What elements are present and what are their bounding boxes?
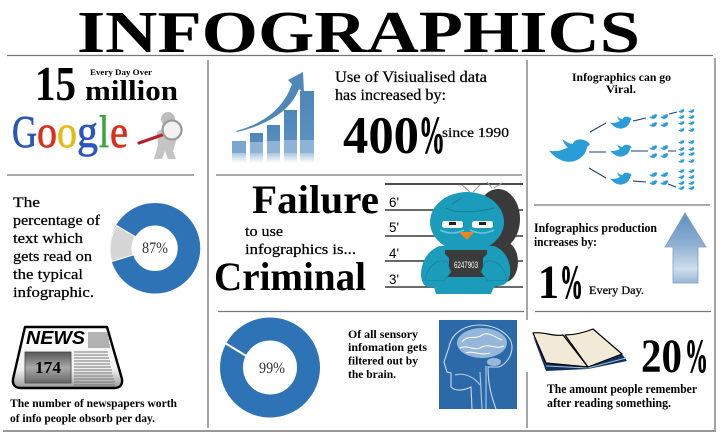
newspaper count: 174 bbox=[35, 358, 62, 377]
panel: sensory information bbox=[225, 320, 517, 409]
icon: brain x-ray bbox=[439, 320, 517, 409]
height chart lines: 4' bbox=[389, 245, 399, 261]
text: amount people remember: The amount people remember bbox=[547, 382, 697, 396]
text: infographics production: Infographics production bbox=[534, 221, 657, 235]
height chart lines bbox=[385, 184, 523, 287]
text: percentage description: text which bbox=[13, 231, 84, 247]
donut chart: 99%: 99% bbox=[259, 360, 285, 377]
big number 400%: 400 bbox=[343, 107, 419, 165]
panel: production increases: % bbox=[560, 256, 583, 309]
text: percentage description: gets read on bbox=[13, 249, 93, 265]
icon: up arrow bbox=[665, 213, 706, 283]
donut chart: 87% bbox=[110, 214, 189, 282]
big number 1%: 1 bbox=[538, 256, 559, 309]
panel: visualised data bbox=[232, 69, 509, 165]
placard number: 6247903 bbox=[454, 260, 478, 270]
million: million bbox=[85, 75, 178, 107]
heading: failure: Failure bbox=[252, 177, 379, 222]
panel: remember 20 percent: after reading something. bbox=[547, 396, 671, 410]
panel: sensory information: filtered out by bbox=[348, 354, 418, 368]
icon: open book bbox=[533, 329, 627, 371]
panel: visualised data: has increased by: bbox=[335, 87, 446, 104]
newspaper heading: NEWS bbox=[26, 328, 85, 348]
panel: remember 20 percent bbox=[533, 329, 708, 410]
panel: newspapers bbox=[10, 327, 177, 425]
icon: mugshot bird bbox=[421, 182, 520, 294]
google logo: g bbox=[77, 107, 98, 157]
google logo bbox=[12, 107, 128, 157]
heading: viral: Infographics can go bbox=[572, 70, 671, 84]
donut chart: 99% bbox=[225, 329, 308, 406]
since 1990: since 1990 bbox=[442, 126, 509, 141]
panel: sensory information: infomation gets bbox=[348, 340, 427, 354]
big number 1% bbox=[538, 256, 583, 309]
panel: google searches bbox=[12, 56, 182, 159]
text: percentage description: The bbox=[13, 195, 40, 211]
panel: 87 percent of text read bbox=[13, 195, 189, 301]
panel: viral: Viral. bbox=[606, 82, 636, 96]
title: INFOGRAPHICS bbox=[77, 0, 640, 65]
text: percentage description: the typical bbox=[13, 267, 83, 283]
panel: newspapers: of info people obsorb per day. bbox=[10, 411, 155, 425]
google logo: o bbox=[57, 107, 77, 157]
google logo: o bbox=[37, 107, 57, 157]
panel: failure is criminal bbox=[214, 177, 523, 299]
big number 15: 15 bbox=[35, 56, 76, 111]
panel: visualised data: % bbox=[419, 107, 445, 165]
height chart lines: 6' bbox=[389, 194, 399, 210]
text: newspapers caption: The number of newspapers worth bbox=[10, 396, 177, 410]
panel: production increases: increases by: bbox=[534, 235, 597, 249]
text: to use infographics is: to use bbox=[245, 224, 283, 240]
text: percentage description bbox=[13, 195, 100, 301]
google logo: G bbox=[12, 107, 37, 157]
google logo: e bbox=[110, 107, 128, 157]
icon: person with magnifying glass bbox=[139, 112, 182, 159]
bar chart with rising arrow bbox=[232, 72, 314, 163]
text: percentage description: infographic. bbox=[13, 285, 94, 301]
text: percentage description: percentage of bbox=[13, 213, 100, 229]
google logo: l bbox=[99, 107, 109, 157]
icon: newspaper bbox=[13, 327, 122, 388]
panel: sensory information: the brain. bbox=[348, 367, 396, 381]
diagram: twitter birds spreading bbox=[549, 109, 695, 190]
panel: failure is criminal: infographics is... bbox=[245, 242, 356, 258]
height chart lines: 5' bbox=[389, 219, 399, 235]
height chart lines: 3' bbox=[389, 271, 399, 287]
heading: criminal: Criminal bbox=[214, 254, 366, 299]
caption: every day over: Every Day Over bbox=[90, 68, 152, 77]
text: use of visualised data: Use of Visiualised data bbox=[335, 69, 487, 86]
every day: Every Day. bbox=[589, 283, 644, 297]
donut chart: 87%: 87% bbox=[142, 240, 168, 257]
big number 20%: 20 bbox=[641, 330, 682, 383]
panel: viral bbox=[549, 70, 695, 190]
text: sensory information: Of all sensory bbox=[348, 327, 418, 341]
panel: production increases bbox=[534, 213, 706, 309]
